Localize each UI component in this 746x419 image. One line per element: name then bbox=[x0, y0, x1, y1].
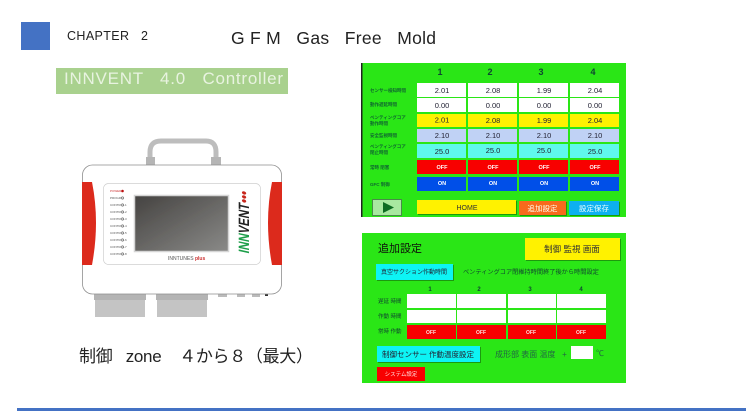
degree unit: ℃ bbox=[596, 349, 604, 358]
device body bbox=[82, 165, 282, 294]
status lights: CONTROL bbox=[110, 238, 125, 242]
control sensor button bbox=[377, 346, 481, 363]
data table: 0.00 bbox=[435, 101, 449, 110]
vertical logo: INNVENT••• bbox=[236, 189, 253, 255]
settings table bbox=[407, 294, 606, 339]
row labels: 作動 時間 bbox=[378, 312, 402, 320]
row labels: 動作時間 bbox=[370, 120, 388, 127]
column headers: 4 bbox=[590, 67, 596, 77]
controller heading bbox=[56, 68, 288, 94]
handle bbox=[150, 141, 216, 164]
save settings button bbox=[569, 201, 620, 216]
status lights: CONTROL bbox=[110, 252, 125, 256]
data table: ON bbox=[438, 181, 446, 187]
data table: 2.01 bbox=[435, 86, 449, 95]
additional settings button bbox=[519, 201, 567, 216]
status lights: 4 bbox=[125, 224, 127, 228]
vacuum suction button bbox=[376, 264, 454, 281]
data table: 2.01 bbox=[435, 116, 449, 124]
small product mark: INNTUNES plus bbox=[168, 256, 205, 262]
control sensor button: 制御センサー 作動温度設定 bbox=[382, 349, 475, 359]
status lights: CONTROL bbox=[110, 217, 125, 221]
caption: 制御 zone ４から８（最大） bbox=[79, 347, 313, 366]
status lights: 2 bbox=[125, 210, 127, 214]
settings table: OFF bbox=[526, 330, 536, 336]
column headers: 2 bbox=[477, 287, 481, 293]
chapter marker square bbox=[21, 22, 50, 50]
settings table: OFF bbox=[476, 330, 486, 336]
control monitor button: 制御 監視 画面 bbox=[544, 244, 600, 254]
data table: 25.0 bbox=[435, 147, 449, 156]
column headers: 2 bbox=[487, 67, 493, 77]
status lights: CONTROL bbox=[110, 224, 125, 228]
row labels: 閉止時間 bbox=[370, 149, 388, 156]
home button: HOME bbox=[456, 205, 478, 212]
row labels: ベンティングコア bbox=[370, 143, 406, 150]
data table: 25.0 bbox=[588, 147, 602, 156]
data table: OFF bbox=[488, 165, 499, 171]
status lights: 1 bbox=[125, 203, 127, 207]
data table: 2.10 bbox=[486, 131, 500, 140]
status lights bbox=[110, 189, 127, 256]
status lights: CONTROL bbox=[110, 245, 125, 249]
panel heading: 追加設定 bbox=[378, 241, 422, 255]
title: G F M Gas Free Mold bbox=[231, 28, 436, 48]
temperature input bbox=[571, 346, 593, 359]
status lights: CONTROL bbox=[110, 210, 125, 214]
row labels: ベンティングコア bbox=[370, 114, 406, 121]
row labels: 遅延 時間 bbox=[378, 297, 402, 305]
data table: 1.99 bbox=[537, 86, 551, 95]
column headers: 4 bbox=[579, 287, 583, 293]
row labels bbox=[378, 297, 402, 335]
data table: ON bbox=[540, 181, 548, 187]
play button bbox=[372, 200, 402, 216]
row labels: 常時 閉塞 bbox=[370, 164, 390, 171]
status lights: CONTROL bbox=[110, 203, 125, 207]
row labels: 安全監視時間 bbox=[370, 132, 397, 139]
column headers: 1 bbox=[437, 67, 443, 77]
data table: 2.08 bbox=[486, 116, 500, 125]
column headers bbox=[437, 67, 596, 77]
system settings button: システム設定 bbox=[385, 370, 418, 378]
row labels bbox=[370, 87, 406, 188]
red grips bbox=[82, 182, 96, 265]
save settings button: 設定保存 bbox=[579, 203, 609, 213]
lower connectors bbox=[95, 297, 145, 317]
status lights: 5 bbox=[125, 231, 127, 235]
controller device illustration bbox=[82, 141, 282, 317]
screen bbox=[134, 196, 228, 252]
row labels: センサー検知時間 bbox=[370, 87, 406, 94]
status lights: 6 bbox=[125, 238, 127, 242]
data table: 0.00 bbox=[486, 101, 500, 110]
home button bbox=[417, 200, 517, 215]
data table: 2.04 bbox=[588, 86, 602, 95]
data table: OFF bbox=[538, 165, 550, 171]
column headers bbox=[428, 287, 583, 293]
additional settings button: 追加設定 bbox=[528, 203, 558, 213]
control monitor button bbox=[525, 238, 621, 261]
note text: ベンティングコア閉維持時間終了後から時間設定 bbox=[463, 268, 599, 276]
status lights: POWER bbox=[110, 189, 122, 193]
data table bbox=[417, 83, 619, 191]
data table: 0.00 bbox=[588, 101, 602, 110]
controller heading: INNVENT 4.0 Controller bbox=[64, 69, 283, 88]
status lights: PROGRM bbox=[110, 196, 124, 200]
status lights: CONTROL bbox=[110, 231, 125, 235]
row labels: 常時 作動 bbox=[378, 327, 402, 335]
front panel bbox=[104, 184, 260, 264]
data table: ON bbox=[489, 181, 497, 187]
settings table: OFF bbox=[426, 330, 436, 336]
panel: additional settings screen bbox=[362, 233, 626, 383]
status lights: 8 bbox=[125, 252, 127, 256]
data table: 2.10 bbox=[537, 131, 551, 140]
data table: 2.04 bbox=[588, 116, 602, 125]
data table: 2.08 bbox=[486, 86, 500, 95]
column headers: 3 bbox=[538, 67, 544, 77]
data table: 25.0 bbox=[537, 146, 551, 155]
settings table: OFF bbox=[576, 330, 586, 336]
data table: OFF bbox=[436, 165, 448, 171]
vacuum suction button: 真空サクション作動時間 bbox=[381, 268, 447, 276]
system settings button bbox=[377, 367, 425, 381]
status lights: 7 bbox=[125, 245, 127, 249]
data table: 0.00 bbox=[537, 101, 551, 110]
row labels: 動作遅延時間 bbox=[370, 101, 397, 108]
data table: 1.99 bbox=[537, 116, 551, 125]
footer rule bbox=[17, 408, 746, 411]
chapter label: CHAPTER 2 bbox=[67, 29, 148, 43]
data table: 2.10 bbox=[435, 131, 449, 140]
data table: OFF bbox=[590, 165, 601, 171]
row labels: GFC 制御 bbox=[370, 181, 390, 188]
panel: monitor screen bbox=[361, 63, 626, 217]
surface temperature label: 成形部 表面 温度 + bbox=[495, 349, 567, 359]
data table: 2.10 bbox=[588, 131, 602, 140]
column headers: 3 bbox=[528, 287, 532, 293]
data table: 25.0 bbox=[486, 146, 500, 155]
status lights: 3 bbox=[125, 217, 127, 221]
column headers: 1 bbox=[428, 287, 432, 293]
data table: ON bbox=[591, 181, 599, 187]
